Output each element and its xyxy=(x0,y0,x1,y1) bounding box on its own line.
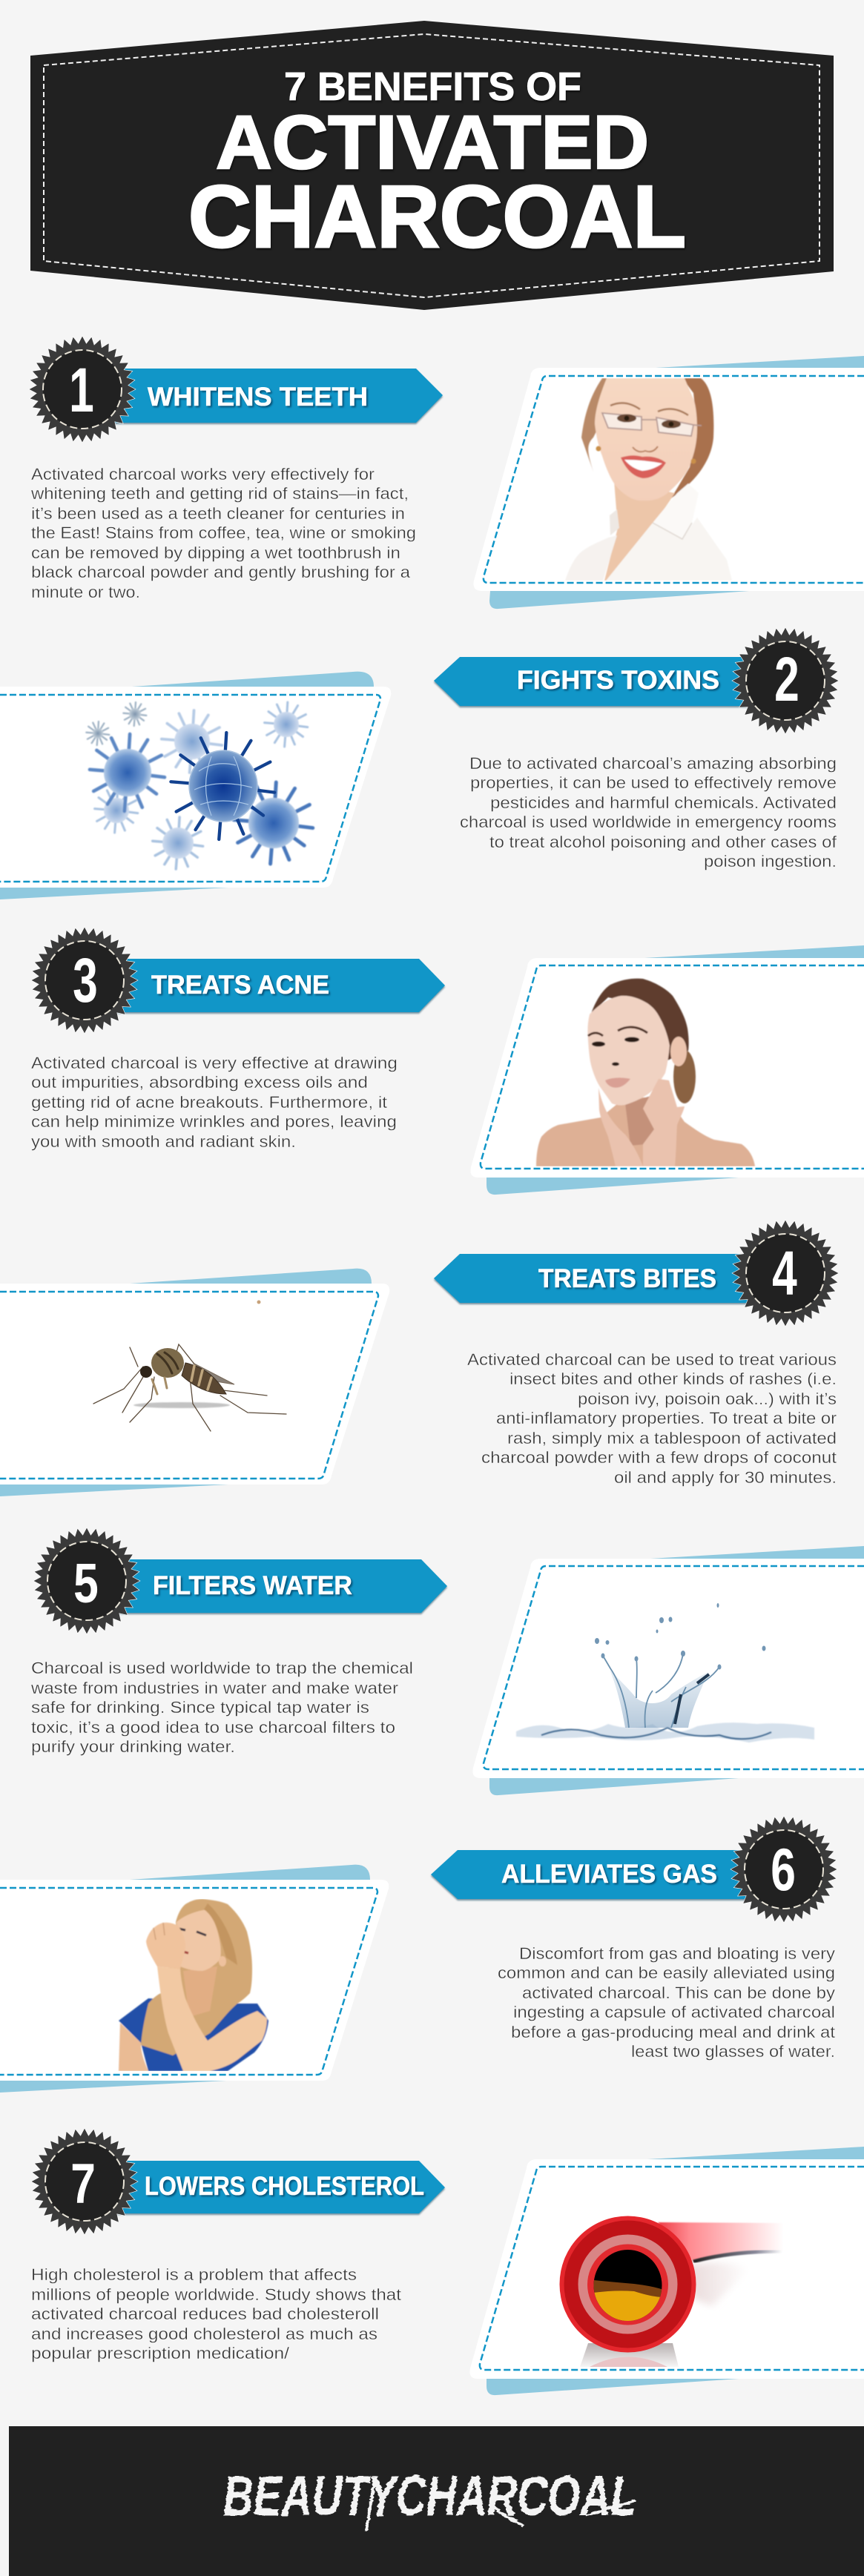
number 4: 4 xyxy=(772,1238,797,1308)
body text 4: rash, simply mix a tablespoon of activated xyxy=(507,1429,837,1447)
body text 1: minute or two. xyxy=(31,583,140,601)
badge 5 xyxy=(33,1528,140,1634)
body text 6: common and can be easily alleviated using xyxy=(498,1964,835,1982)
photo: smiling woman with glasses xyxy=(565,378,732,581)
body text 2 xyxy=(460,754,837,871)
body text 6: least two glasses of water. xyxy=(631,2042,835,2061)
number 2: 2 xyxy=(774,644,799,714)
body text 6: activated charcoal. This can be done by xyxy=(522,1984,836,2002)
ribbon 6 xyxy=(431,1850,786,1899)
ribbon 5 xyxy=(111,1559,447,1613)
body text 3: can help minimize wrinkles and pores, leaving xyxy=(31,1112,397,1131)
body text 2: pesticides and harmful chemicals. Activated xyxy=(490,793,837,812)
body text 4: charcoal powder with a few drops of coconut xyxy=(481,1448,837,1467)
heading 4: TREATS BITES xyxy=(538,1264,716,1293)
body text 5: safe for drinking. Since typical tap water is xyxy=(31,1698,369,1717)
body text 6 xyxy=(498,1944,836,2061)
image card 4 xyxy=(0,1269,389,1496)
body text 5: purify your drinking water. xyxy=(31,1737,235,1756)
ribbon 2 xyxy=(434,657,786,706)
body text 3: you with smooth and radiant skin. xyxy=(31,1132,296,1151)
section 4: treats bites xyxy=(0,1220,839,1496)
body text 2: to treat alcohol poisoning and other cases of xyxy=(489,833,837,851)
body text 5 xyxy=(30,1659,413,1756)
title line 2: ACTIVATED xyxy=(216,100,649,185)
body text 2: Due to activated charcoal’s amazing absorbing xyxy=(469,754,837,773)
body text 6: ingesting a capsule of activated charcoal xyxy=(513,2003,835,2021)
photo: mosquito xyxy=(93,1301,286,1431)
body text 4 xyxy=(467,1350,837,1487)
body text 2: charcoal is used worldwide in emergency rooms xyxy=(460,813,837,831)
heading 6: ALLEVIATES GAS xyxy=(501,1860,717,1889)
body text 4: anti-inflamatory properties. To treat a bite or xyxy=(496,1409,837,1427)
body text 4: insect bites and other kinds of rashes (i.e. xyxy=(510,1370,837,1388)
badge 1 xyxy=(29,336,136,443)
body text 1: it’s been used as a teeth cleaner for centuries in xyxy=(31,504,405,523)
heading 3: TREATS ACNE xyxy=(151,971,329,1000)
title line 1: 7 BENEFITS OF xyxy=(284,65,581,109)
body text 7: millions of people worldwide. Study shows that xyxy=(31,2285,402,2304)
body text 6: before a gas-producing meal and drink at xyxy=(511,2023,836,2041)
section 6: alleviates gas xyxy=(0,1816,837,2093)
header banner xyxy=(30,21,834,310)
body text 1: the East! Stains from coffee, tea, wine or smoking xyxy=(31,524,416,542)
section 7: lowers cholesterol xyxy=(31,2128,864,2395)
body text 5: waste from industries in water and make water xyxy=(30,1679,399,1697)
body text 1 xyxy=(30,465,416,601)
body text 1: Activated charcoal works very effectively for xyxy=(31,465,375,483)
ribbon 1 xyxy=(111,369,443,423)
image card 3 xyxy=(470,945,864,1195)
section 5: filters water xyxy=(30,1528,864,1795)
image card 2 xyxy=(0,672,391,899)
heading 7: LOWERS CHOLESTEROL xyxy=(145,2172,424,2201)
body text 4: oil and apply for 30 minutes. xyxy=(614,1468,837,1487)
heading 1: WHITENS TEETH xyxy=(148,383,368,412)
number 1: 1 xyxy=(69,355,94,425)
photo: woman touching face xyxy=(536,979,755,1166)
section 3: treats acne xyxy=(31,927,864,1195)
body text 7: and increases good cholesterol as much as xyxy=(31,2325,377,2343)
photo: water splash xyxy=(516,1603,814,1743)
body text 7: activated charcoal reduces bad cholesteroll xyxy=(31,2305,379,2323)
body text 3 xyxy=(31,1054,398,1151)
section 2: fights toxins xyxy=(0,627,839,899)
body text 3: out impurities, absordbing excess oils and xyxy=(31,1073,368,1092)
body text 1: whitening teeth and getting rid of stains—in fact, xyxy=(30,484,409,503)
body text 3: getting rid of acne breakouts. Furthermore, it xyxy=(31,1093,388,1112)
ribbon 4 xyxy=(434,1254,786,1303)
section 1: whitens teeth xyxy=(29,336,864,609)
body text 2: properties, it can be used to effectively remove xyxy=(470,773,837,792)
image card 1 xyxy=(473,356,864,609)
photo: woman holding nose xyxy=(119,1899,268,2071)
body text 2: poison ingestion. xyxy=(704,852,837,871)
number 7: 7 xyxy=(70,2152,96,2216)
badge 3 xyxy=(31,927,138,1034)
picture: virus cells xyxy=(86,702,313,869)
number 5: 5 xyxy=(73,1552,99,1615)
body text 7: popular prescription medication/ xyxy=(31,2344,290,2362)
ribbon 3 xyxy=(111,959,445,1012)
heading 5: FILTERS WATER xyxy=(153,1571,352,1600)
body text 4: poison ivy, poisoin oak...) with it’s xyxy=(578,1390,837,1408)
badge 6 xyxy=(731,1816,837,1923)
footer bar xyxy=(9,2426,864,2576)
body text 7 xyxy=(31,2265,402,2362)
image card 7 xyxy=(469,2147,864,2395)
body text 1: black charcoal powder and gently brushing for a xyxy=(31,563,411,581)
ribbon 7 xyxy=(111,2161,445,2213)
number 6: 6 xyxy=(771,1837,796,1903)
title line 3: CHARCOAL xyxy=(188,168,686,266)
badge 2 xyxy=(732,627,839,734)
body text 1: can be removed by dipping a wet toothbrush in xyxy=(31,544,400,562)
number 3: 3 xyxy=(73,945,98,1015)
body text 3: Activated charcoal is very effective at drawing xyxy=(31,1054,398,1072)
heading 2: FIGHTS TOXINS xyxy=(517,666,719,695)
body text 6: Discomfort from gas and bloating is very xyxy=(519,1944,836,1963)
body text 5: Charcoal is used worldwide to trap the chemical xyxy=(31,1659,413,1677)
image card 6 xyxy=(0,1865,389,2093)
body text 5: toxic, it’s a good idea to use charcoal filters to xyxy=(31,1718,395,1737)
badge 7 xyxy=(31,2128,138,2235)
badge 4 xyxy=(732,1220,839,1327)
image card 5 xyxy=(472,1546,864,1795)
body text 4: Activated charcoal can be used to treat various xyxy=(467,1350,837,1369)
footer logo: BEAUTYCHARCOAL xyxy=(223,2465,636,2528)
picture: artery with cholesterol xyxy=(559,2216,784,2367)
body text 7: High cholesterol is a problem that affects xyxy=(31,2265,357,2284)
